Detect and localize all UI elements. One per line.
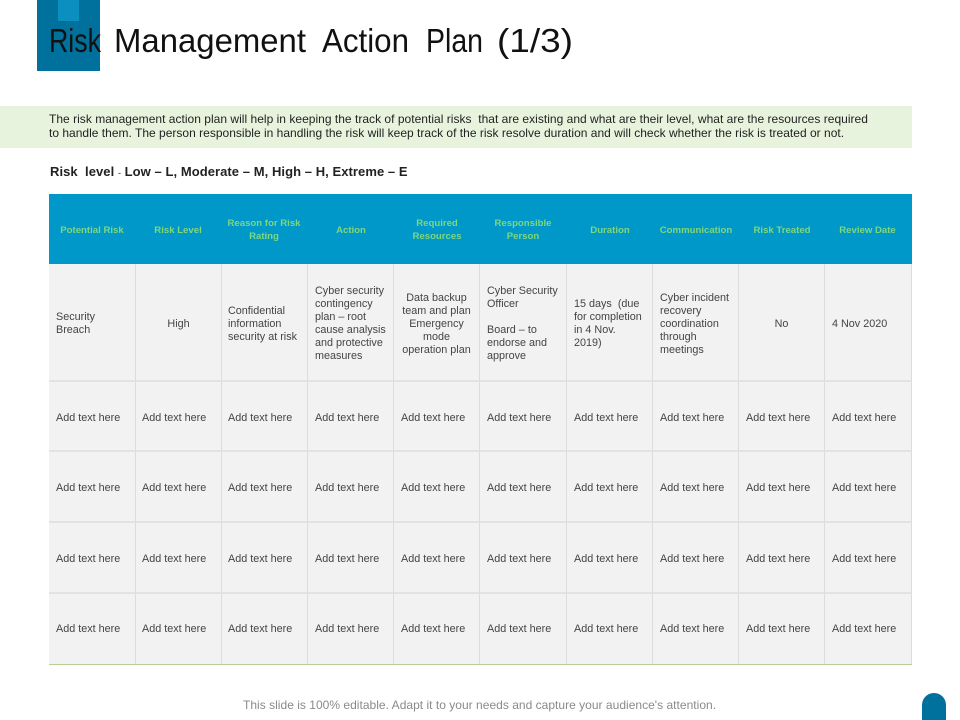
cell: duration: for completion — [574, 311, 642, 323]
header: responsible person — [494, 218, 552, 242]
cell: resources: Emergency — [409, 318, 464, 330]
header: potential risk: Potential Risk — [60, 224, 124, 236]
header: duration: Duration — [590, 224, 630, 236]
intro text: The risk management action plan will help in keeping the track of potential risks that are existing and what are their level, what are the resources required — [49, 112, 868, 126]
header: required resources — [412, 218, 462, 242]
cell: resources: Data backup — [406, 292, 467, 304]
cell: reason — [222, 264, 308, 382]
cell: communication: meetings — [660, 344, 704, 356]
row 5: Add text here — [228, 622, 292, 634]
cell: communication: through — [660, 330, 697, 342]
title: (1/3) — [497, 22, 573, 59]
decorative title block — [37, 0, 100, 71]
header: required resources: Resources — [412, 231, 462, 242]
title: Action — [322, 22, 409, 59]
row 5: Add text here — [315, 622, 379, 634]
row 2: Add text here — [832, 412, 896, 424]
row 4: Add text here — [401, 553, 465, 565]
lighter tab inside title block — [58, 0, 79, 21]
intro text: to handle them. The person responsible in handling the risk will keep track of the risk resolve duration and will check whether the risk is treated or not. — [49, 126, 844, 140]
title: Risk — [49, 22, 101, 59]
footer note: This slide is 100% editable. Adapt it to your needs and capture your audience's attention. — [243, 698, 716, 712]
row 3: Add text here — [746, 482, 810, 494]
row 3: Add text here — [660, 482, 724, 494]
cell: responsible: Officer — [487, 298, 519, 310]
cell: reason: information — [228, 318, 281, 330]
row 2 — [49, 382, 912, 452]
cell: action: and protective — [315, 337, 383, 349]
intro text — [49, 112, 868, 140]
cell: duration: in 4 Nov. — [574, 324, 616, 336]
row 2: Add text here — [315, 412, 379, 424]
row 3: Add text here — [487, 482, 551, 494]
row 4: Add text here — [832, 553, 896, 565]
title: Management — [114, 22, 306, 59]
row 2: Add text here — [56, 412, 120, 424]
cell: communication: recovery — [660, 304, 701, 316]
header: reason: Rating — [249, 231, 279, 242]
row 5: Add text here — [746, 622, 810, 634]
cell: high — [136, 264, 222, 382]
table header row — [49, 194, 912, 264]
cell: duration: 2019) — [574, 337, 602, 349]
cell: resources: team and plan — [402, 304, 471, 316]
header: responsible person: Person — [507, 231, 539, 242]
cell: duration — [567, 264, 653, 382]
header: action: Action — [336, 224, 366, 236]
header: communication: Communication — [660, 224, 732, 236]
row 4: Add text here — [574, 553, 638, 565]
title — [49, 22, 573, 59]
cell: security breach: Security — [56, 311, 95, 323]
cell: communication: coordination — [660, 318, 719, 330]
row 3: Add text here — [228, 482, 292, 494]
cell: high: High — [167, 318, 190, 330]
row 4: Add text here — [142, 553, 206, 565]
row 2: Add text here — [574, 412, 638, 424]
cell: no: No — [775, 318, 788, 330]
row 4: Add text here — [487, 553, 551, 565]
row 5: Add text here — [487, 622, 551, 634]
cell: date: 4 Nov 2020 — [832, 318, 887, 330]
cell: security breach — [49, 264, 136, 382]
cell: reason: Confidential — [228, 304, 285, 316]
cell: security breach: Breach — [56, 324, 90, 336]
row 5: Add text here — [660, 622, 724, 634]
row 5: Add text here — [142, 622, 206, 634]
row 2: Add text here — [401, 412, 465, 424]
header: risk treated: Risk Treated — [753, 224, 811, 236]
row 1 — [49, 264, 912, 382]
row 5: Add text here — [574, 622, 638, 634]
header: reason: Reason for Risk — [227, 218, 301, 229]
row 3: Add text here — [315, 482, 379, 494]
cell: action: Cyber security — [315, 285, 384, 297]
row 4: Add text here — [228, 553, 292, 565]
row 3: Add text here — [142, 482, 206, 494]
header: reason — [227, 218, 301, 242]
cell: resources: mode — [423, 330, 450, 342]
row 2: Add text here — [746, 412, 810, 424]
cell: responsible: Board – to — [487, 324, 537, 336]
cell: communication: Cyber incident — [660, 292, 729, 304]
row 2: Add text here — [142, 412, 206, 424]
row 2: Add text here — [228, 412, 292, 424]
cell: resources — [394, 264, 480, 382]
row 2: Add text here — [487, 412, 551, 424]
row 4: Add text here — [56, 553, 120, 565]
cell: duration: 15 days (due — [574, 298, 639, 310]
cell: communication — [653, 264, 739, 382]
cell: responsible: endorse and — [487, 337, 547, 349]
row 3: Add text here — [401, 482, 465, 494]
cell: action — [308, 264, 394, 382]
row 3: Add text here — [832, 482, 896, 494]
row 4: Add text here — [315, 553, 379, 565]
header: review date: Review Date — [839, 224, 896, 236]
cell: action: cause analysis — [315, 324, 386, 336]
row 5 — [49, 594, 912, 665]
cell: responsible: approve — [487, 350, 526, 362]
table — [49, 194, 912, 665]
row 3: Add text here — [56, 482, 120, 494]
cell: resources: operation plan — [402, 344, 471, 356]
row 4 — [49, 523, 912, 594]
cell: date — [825, 264, 912, 382]
row 4: Add text here — [660, 553, 724, 565]
cell: responsible — [480, 264, 567, 382]
row 4: Add text here — [746, 553, 810, 565]
cell: responsible: Cyber Security — [487, 285, 558, 297]
intro band — [0, 106, 912, 148]
header: responsible person: Responsible — [494, 218, 552, 229]
cell: reason: security at risk — [228, 330, 297, 342]
row 3 — [49, 452, 912, 523]
cell: action: contingency — [315, 298, 373, 310]
cell: no — [739, 264, 825, 382]
row 3: Add text here — [574, 482, 638, 494]
row 2: Add text here — [660, 412, 724, 424]
cell: action: measures — [315, 350, 362, 362]
header: required resources: Required — [416, 218, 458, 229]
page tab — [922, 693, 946, 720]
cell: action: plan – root — [315, 311, 366, 323]
title: Plan — [426, 22, 483, 59]
row 5: Add text here — [401, 622, 465, 634]
header: risk level: Risk Level — [154, 224, 202, 236]
row 5: Add text here — [56, 622, 120, 634]
risk level legend: Risk level - Low – L, Moderate – M, High – H, Extreme – E — [50, 164, 408, 179]
row 5: Add text here — [832, 622, 896, 634]
